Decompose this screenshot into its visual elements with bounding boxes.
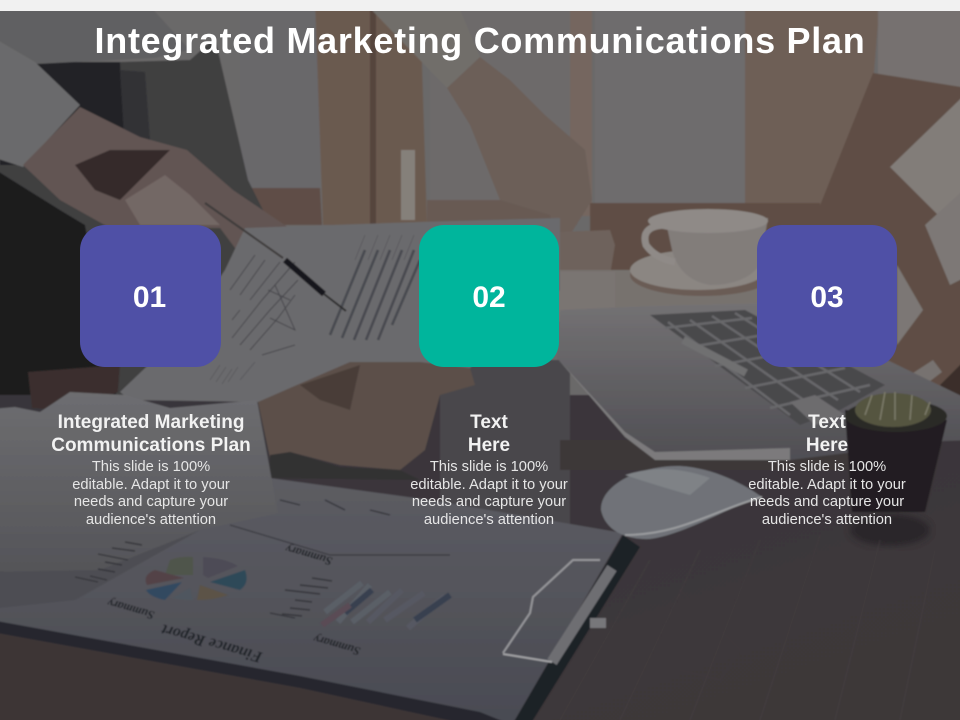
text block 2 [410, 412, 568, 528]
report document [0, 478, 623, 720]
stack of books [560, 230, 615, 305]
body 2 [410, 459, 568, 528]
heading 2 [468, 412, 510, 456]
heading 1: Integrated Marketing [58, 412, 244, 433]
clipboard edge [512, 535, 640, 720]
text block 3 [748, 412, 906, 528]
body 1: editable. Adapt it to your [72, 477, 230, 493]
body 2: This slide is 100% [430, 459, 548, 475]
clipboard clip [503, 560, 612, 662]
upside-down report labels: Summary [105, 596, 156, 623]
card 01: 01 [133, 281, 166, 314]
body 1 [72, 459, 230, 528]
heading 3: Here [806, 435, 848, 456]
heading 3: Text [808, 412, 846, 433]
top margin strip [0, 0, 960, 11]
upside-down report labels: Summary [283, 542, 334, 569]
body 3: audience's attention [762, 512, 892, 528]
coffee cup and saucer [630, 254, 774, 296]
body 2: audience's attention [424, 512, 554, 528]
wooden window frame [315, 0, 427, 225]
heading 2: Here [468, 435, 510, 456]
text block 1 [51, 412, 251, 528]
pointing hand [23, 107, 297, 264]
body 3: needs and capture your [750, 494, 904, 510]
title: Integrated Marketing Communications Plan [95, 20, 865, 61]
report text lines [75, 500, 450, 618]
pie chart [146, 557, 247, 600]
upside-down report labels: Summary [311, 632, 362, 659]
heading 3 [806, 412, 848, 456]
body 1: needs and capture your [74, 494, 228, 510]
desk surface [555, 270, 817, 320]
card 02 [419, 225, 559, 367]
upper chart sheet [120, 218, 560, 402]
upside-down report labels: Finance Report [159, 620, 265, 666]
upper right sleeve [362, 0, 480, 88]
heading 1 [51, 412, 251, 456]
heading 1: Communications Plan [51, 435, 251, 456]
card 03: 03 [810, 281, 844, 314]
body 3: This slide is 100% [768, 459, 886, 475]
sweater sleeve [0, 0, 190, 64]
white shirt cuff [0, 392, 278, 572]
computer mouse [601, 466, 762, 539]
left forearm dark sleeve [28, 365, 120, 410]
body 2: editable. Adapt it to your [410, 477, 568, 493]
heading 2: Text [470, 412, 508, 433]
table [0, 395, 960, 720]
card 02: 02 [472, 281, 506, 314]
body 2: needs and capture your [412, 494, 566, 510]
potted cactus [845, 392, 947, 546]
lower hand [258, 362, 475, 470]
card 01 [80, 225, 221, 367]
laptop [557, 303, 960, 460]
report bar chart [322, 583, 450, 628]
body 3: editable. Adapt it to your [748, 477, 906, 493]
person torso [0, 38, 285, 400]
right hand [447, 57, 592, 235]
body 1: This slide is 100% [92, 459, 210, 475]
keyboard [650, 310, 885, 425]
upside-down report labels [105, 542, 362, 666]
body 1: audience's attention [86, 512, 216, 528]
card 03 [757, 225, 897, 367]
pen [205, 203, 346, 311]
window wall [0, 0, 960, 420]
wood grain [560, 535, 935, 720]
chair and right side [878, 0, 960, 88]
body 3 [748, 459, 906, 528]
